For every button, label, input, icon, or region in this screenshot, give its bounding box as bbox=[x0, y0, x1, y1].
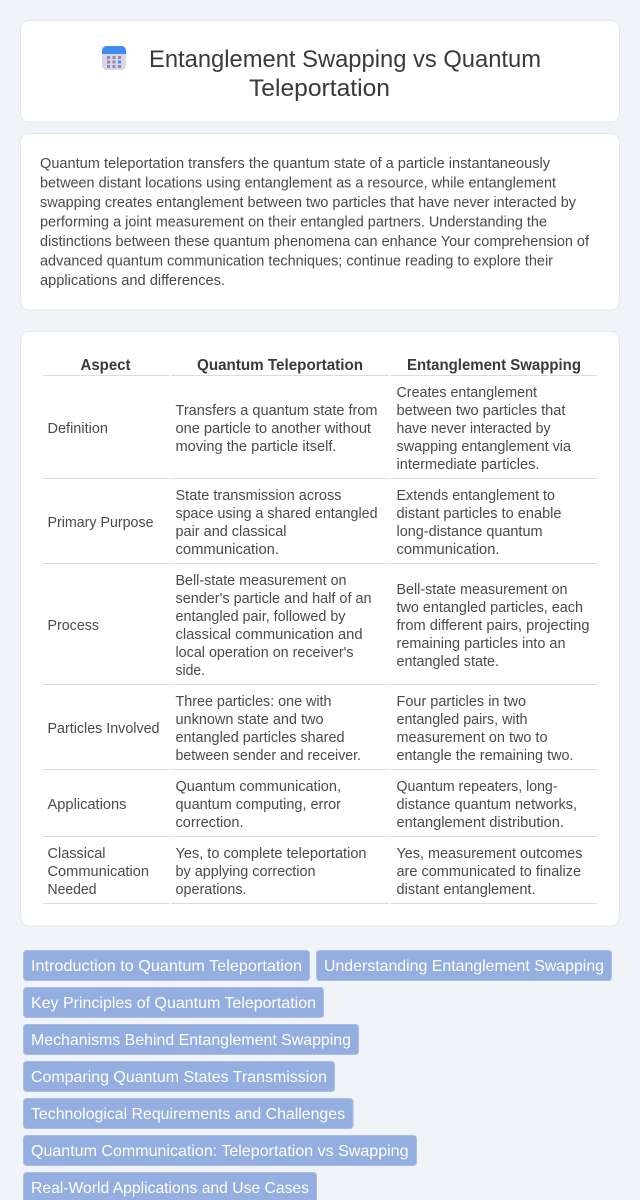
table row: classical communication needed bbox=[48, 846, 582, 898]
tag: comparing: Comparing Quantum States Transmission bbox=[31, 1069, 327, 1086]
table row: process: local operation on receiver's bbox=[176, 645, 354, 661]
tag: introduction bbox=[24, 950, 310, 980]
table row: primary purpose: State transmission across bbox=[176, 488, 342, 504]
tag: technological: Technological Requirements and Challenges bbox=[31, 1106, 345, 1123]
table row: process: remaining particles into an bbox=[396, 636, 566, 652]
table row: definition: between two particles that bbox=[396, 403, 566, 419]
table header row: Quantum Teleportation bbox=[197, 357, 363, 374]
table row: process: Process bbox=[48, 618, 99, 634]
table row: process: side. bbox=[176, 663, 205, 679]
tag: real-world: Real-World Applications and Use Cases bbox=[31, 1180, 309, 1197]
table row: definition: intermediate particles. bbox=[396, 457, 540, 473]
tag: introduction: Introduction to Quantum Teleportation bbox=[31, 958, 302, 975]
text block: introduction paragraph bbox=[40, 156, 590, 289]
table row: applications bbox=[48, 779, 577, 831]
tag: technological bbox=[24, 1098, 353, 1128]
topic tags bbox=[24, 950, 612, 1200]
tag: mechanisms bbox=[24, 1024, 358, 1054]
table row: classical communication needed: by applying correction bbox=[176, 864, 316, 880]
table row: classical communication needed: Yes, to complete teleportation bbox=[176, 846, 366, 862]
table row: process: Bell-state measurement on bbox=[176, 573, 346, 589]
tag: quantum communication bbox=[24, 1136, 416, 1166]
text block: introduction paragraph: Quantum teleportation transfers the quantum state of a particle instantaneously bbox=[40, 156, 551, 172]
table row: applications: distance quantum networks, bbox=[396, 797, 577, 813]
table row: process: from different pairs, projecting bbox=[396, 618, 590, 634]
tag: quantum communication: Quantum Communication: Teleportation vs Swapping bbox=[31, 1143, 409, 1160]
table row: applications: Quantum communication, bbox=[176, 779, 341, 795]
text block: introduction paragraph: between distant locations using entanglement as a resource, while entanglement bbox=[40, 176, 556, 192]
icon: calendar bbox=[102, 46, 126, 70]
text block: introduction paragraph: distinctions between these quantum phenomena can enhance Your comprehension of bbox=[40, 234, 590, 250]
table row: process: Bell-state measurement on bbox=[396, 582, 568, 598]
table row: classical communication needed: are communicated to finalize bbox=[396, 864, 581, 880]
table row: classical communication needed: Communication bbox=[48, 864, 149, 880]
tag: understanding: Understanding Entanglement Swapping bbox=[324, 958, 604, 975]
table row: particles involved: unknown state and two bbox=[176, 712, 324, 728]
tag: key principles: Key Principles of Quantum Teleportation bbox=[31, 995, 316, 1012]
table row: primary purpose: Extends entanglement to bbox=[396, 488, 555, 504]
table header row bbox=[80, 357, 581, 374]
table row: particles involved: entangle the remaining two. bbox=[396, 748, 574, 764]
table row: definition: moving the particle itself. bbox=[176, 439, 336, 455]
table row: particles involved: between sender and receiver. bbox=[176, 748, 361, 764]
table header row: Aspect bbox=[80, 357, 131, 374]
tag: key principles bbox=[24, 988, 324, 1018]
table row: primary purpose: communication. bbox=[176, 542, 279, 558]
table row: particles involved: entangled particles shared bbox=[176, 730, 344, 746]
table row: primary purpose bbox=[48, 488, 562, 558]
text block: introduction paragraph: performing a joint measurement on their entangled partners. Understanding the bbox=[40, 214, 547, 230]
tag: understanding bbox=[316, 950, 612, 980]
table row: applications: Applications bbox=[48, 797, 126, 813]
table row: particles involved: Three particles: one with bbox=[176, 694, 332, 710]
table row: process: entangled pair, followed by bbox=[176, 609, 346, 625]
table row: classical communication needed: distant entanglement. bbox=[396, 882, 536, 898]
table row: applications: quantum computing, error bbox=[176, 797, 341, 813]
table row: primary purpose: distant particles to enable bbox=[396, 506, 562, 522]
table row: classical communication needed: Yes, measurement outcomes bbox=[396, 846, 582, 862]
title: Teleportation bbox=[249, 75, 390, 102]
table row: definition: swapping entanglement via bbox=[396, 439, 571, 455]
table row: process: two entangled particles, each bbox=[396, 600, 583, 616]
text block: introduction paragraph: applications and differences. bbox=[40, 273, 225, 289]
text block: introduction paragraph: advanced quantum communication techniques; continue reading to explore their bbox=[40, 254, 553, 270]
table row: primary purpose: long-distance quantum bbox=[396, 524, 543, 540]
table row: definition: Definition bbox=[48, 421, 108, 437]
panel: comparison table bbox=[20, 332, 620, 926]
table row: definition: Transfers a quantum state from bbox=[176, 403, 378, 419]
table row: process bbox=[48, 573, 590, 679]
tag: mechanisms: Mechanisms Behind Entanglement Swapping bbox=[31, 1032, 351, 1049]
table row: particles involved: Four particles in two bbox=[396, 694, 526, 710]
table row: classical communication needed: operations. bbox=[176, 882, 246, 898]
tag: real-world bbox=[24, 1172, 316, 1200]
table row: definition bbox=[48, 385, 571, 473]
table header row: Entanglement Swapping bbox=[407, 357, 581, 374]
title bbox=[149, 46, 541, 102]
table row: particles involved bbox=[48, 694, 574, 764]
title: Entanglement Swapping vs Quantum bbox=[149, 46, 541, 73]
table row: primary purpose: communication. bbox=[396, 542, 500, 558]
table row: process: classical communication and bbox=[176, 627, 362, 643]
table row: primary purpose: pair and classical bbox=[176, 524, 286, 540]
table row: primary purpose: Primary Purpose bbox=[48, 515, 154, 531]
table row: particles involved: entangled pairs, with bbox=[396, 712, 528, 728]
table row: definition: Creates entanglement bbox=[396, 385, 537, 401]
table row: definition: have never interacted by bbox=[396, 421, 551, 437]
panel: introduction bbox=[20, 134, 620, 310]
table row: applications: Quantum repeaters, long- bbox=[396, 779, 558, 795]
table row: primary purpose: space using a shared entangled bbox=[176, 506, 378, 522]
table row: definition: one particle to another without bbox=[176, 421, 371, 437]
tag: comparing bbox=[24, 1062, 334, 1092]
table row: classical communication needed: Classical bbox=[48, 846, 106, 862]
panel: title card bbox=[20, 20, 620, 122]
table row: applications: entanglement distribution. bbox=[396, 815, 564, 831]
table row: applications: correction. bbox=[176, 815, 244, 831]
text block: introduction paragraph: swapping creates entanglement between two particles that have never interacted by bbox=[40, 195, 577, 211]
table row: process: sender's particle and half of an bbox=[176, 591, 372, 607]
table row: particles involved: measurement on two to bbox=[396, 730, 548, 746]
table row: classical communication needed: Needed bbox=[48, 882, 96, 898]
table row: particles involved: Particles Involved bbox=[48, 721, 160, 737]
table row: process: entangled state. bbox=[396, 654, 499, 670]
